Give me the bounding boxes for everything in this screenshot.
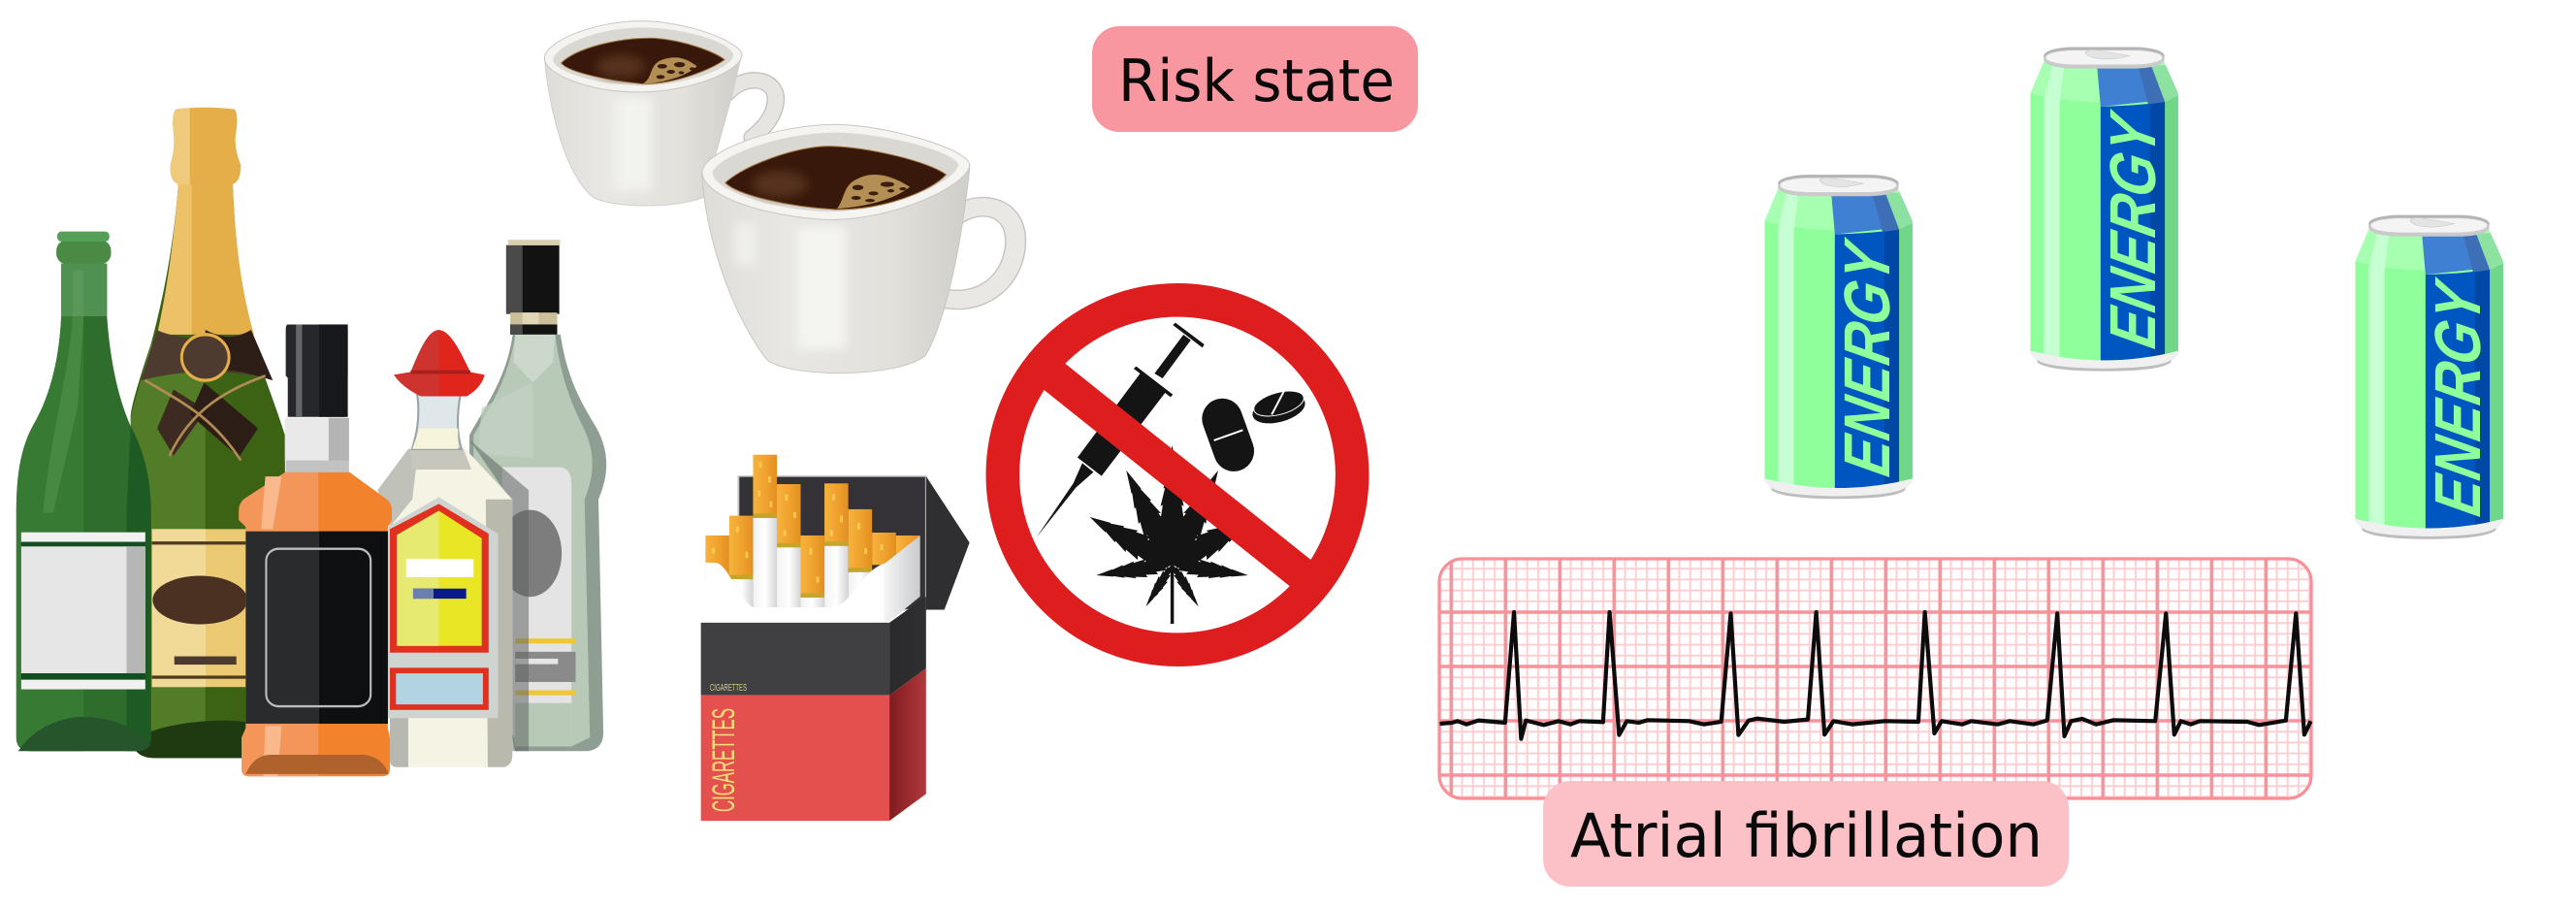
champagne bottle — [131, 108, 286, 758]
whisky bottle — [239, 324, 392, 776]
chart: ECG strip — [1439, 559, 2311, 798]
icon: energy drink can right — [2351, 215, 2510, 540]
pack small label: CIGARETTES — [710, 683, 747, 694]
icon: energy drink can left — [1760, 175, 1919, 501]
can text: ENERGY — [2423, 274, 2495, 521]
ECG trace — [1439, 612, 2311, 739]
label: Atrial fibrillation: Atrial fibrillation — [1570, 800, 2043, 871]
front coffee cup — [702, 124, 1015, 373]
icon: two coffee cups — [544, 21, 1015, 373]
open lid — [738, 476, 970, 610]
icon: energy drink can middle — [2026, 48, 2185, 373]
back coffee cup — [544, 21, 776, 206]
icon: alcohol bottles — [16, 108, 606, 776]
icon: no drugs sign — [1003, 300, 1352, 650]
label: Atrial fibrillation — [1543, 781, 2069, 887]
prohibition ring — [1003, 300, 1352, 650]
label: Risk state — [1092, 26, 1418, 132]
can text: ENERGY — [1832, 234, 1904, 481]
tequila bottle — [377, 330, 512, 767]
icon: cigarette pack — [701, 455, 970, 821]
green wine bottle — [16, 232, 151, 751]
pill and tablet — [1196, 386, 1308, 477]
prohibition slash — [1037, 358, 1318, 592]
pack front — [701, 597, 926, 821]
pack vertical label: CIGARETTES — [706, 708, 741, 812]
foil insert — [703, 536, 920, 622]
label: Risk state: Risk state — [1118, 48, 1395, 115]
cigarettes — [705, 455, 920, 608]
cannabis leaf — [1083, 445, 1261, 624]
clear gin bottle — [469, 240, 606, 751]
syringe — [1037, 323, 1205, 537]
can text: ENERGY — [2098, 106, 2170, 353]
